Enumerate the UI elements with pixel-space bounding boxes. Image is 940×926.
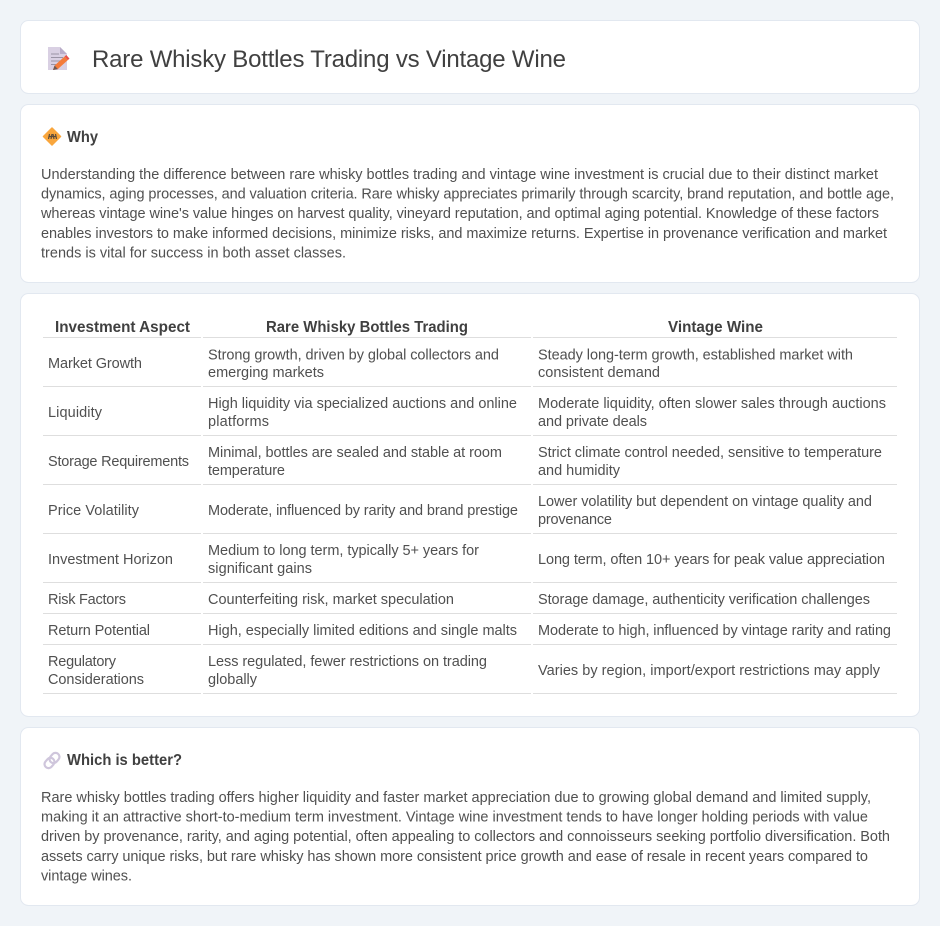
icon: chain link bbox=[43, 751, 61, 770]
row: storage requirements: Minimal, bottles are sealed and stable at room bbox=[208, 445, 502, 461]
row: price volatility: Price Volatility bbox=[48, 503, 140, 519]
icon: memo with pencil bbox=[48, 47, 69, 70]
row: regulatory considerations: Varies by region, import/export restrictions may apply bbox=[538, 663, 881, 679]
row: investment horizon: significant gains bbox=[208, 561, 312, 577]
row: regulatory considerations: Less regulated, fewer restrictions on trading bbox=[208, 654, 487, 670]
row: regulatory considerations: globally bbox=[208, 672, 258, 688]
row: return potential: Return Potential bbox=[48, 623, 150, 639]
row: market growth: emerging markets bbox=[208, 365, 324, 381]
row: storage requirements: temperature bbox=[208, 463, 285, 479]
row: market growth: consistent demand bbox=[538, 365, 660, 381]
row: return potential: Moderate to high, influenced by vintage rarity and rating bbox=[538, 623, 891, 639]
row: risk factors: Storage damage, authenticity verification challenges bbox=[538, 592, 870, 608]
row: storage requirements: Strict climate control needed, sensitive to temperature bbox=[538, 445, 882, 461]
row: regulatory considerations bbox=[43, 654, 897, 694]
row: price volatility: Lower volatility but dependent on vintage quality and bbox=[538, 494, 872, 510]
row: investment horizon: Investment Horizon bbox=[48, 552, 173, 568]
row: investment horizon: Medium to long term, typically 5+ years for bbox=[208, 543, 479, 559]
row: liquidity: and private deals bbox=[538, 414, 647, 430]
row: price volatility: provenance bbox=[538, 512, 612, 528]
text block: why: enables investors to make informed decisions, minimize risks, and maximize returns. Expertise in provenance verification and market bbox=[41, 226, 887, 242]
heading: which is better: Which is better? bbox=[67, 752, 182, 769]
row: risk factors: Counterfeiting risk, market speculation bbox=[208, 592, 454, 608]
heading: why: Why bbox=[67, 129, 98, 146]
row: investment horizon: Long term, often 10+ years for peak value appreciation bbox=[538, 552, 885, 568]
row: risk factors: Risk Factors bbox=[48, 592, 126, 608]
text block: why: trends is vital for success in both asset classes. bbox=[41, 245, 346, 261]
panel: which is better bbox=[20, 728, 920, 906]
row: liquidity: Moderate liquidity, often slower sales through auctions bbox=[538, 396, 886, 412]
text block: why: whereas vintage wine's value hinges on harvest quality, vineyard reputation, and optimal aging potential. Knowledge of these factors bbox=[40, 206, 879, 222]
text block: why bbox=[40, 167, 894, 261]
row: price volatility bbox=[43, 494, 897, 534]
row: investment horizon bbox=[43, 543, 897, 582]
row: market growth: Strong growth, driven by global collectors and bbox=[208, 348, 499, 364]
panel: comparison table bbox=[20, 294, 920, 716]
table header: Rare Whisky Bottles Trading bbox=[266, 319, 468, 336]
row: storage requirements bbox=[43, 445, 897, 484]
row: market growth: Steady long-term growth, established market with bbox=[538, 348, 853, 364]
row: liquidity: Liquidity bbox=[48, 405, 103, 421]
row: market growth bbox=[43, 348, 897, 386]
text block: which is better: assets carry unique risks, but rare whisky has shown more consistent price growth and ease of resale in recent years compared to bbox=[41, 849, 868, 865]
table header: Investment Aspect bbox=[55, 319, 191, 336]
row: regulatory considerations: Considerations bbox=[48, 672, 144, 688]
text block: which is better: vintage wines. bbox=[41, 868, 132, 884]
row: price volatility: Moderate, influenced by rarity and brand prestige bbox=[208, 503, 518, 519]
row: liquidity: platforms bbox=[208, 414, 269, 430]
text block: which is better: Rare whisky bottles trading offers higher liquidity and faster market appreciation due to growing global demand and limited supply, bbox=[41, 790, 871, 806]
row: storage requirements: Storage Requirements bbox=[48, 454, 189, 470]
icon: orange diamond sign bbox=[44, 128, 60, 145]
table header bbox=[43, 319, 897, 338]
text block: which is better: driven by provenance, rarity, and aging potential, often appealing to collectors and connoisseurs seeking portfolio diversification. Both bbox=[41, 829, 890, 845]
panel: why bbox=[20, 104, 920, 282]
row: return potential bbox=[43, 623, 897, 644]
row: storage requirements: and humidity bbox=[538, 463, 621, 479]
row: risk factors bbox=[43, 592, 897, 614]
title: Rare Whisky Bottles Trading vs Vintage Wine bbox=[92, 46, 566, 73]
panel: title header bbox=[20, 20, 920, 94]
text block: why: Understanding the difference between rare whisky bottles trading and vintage wine investment is crucial due to their distinct market bbox=[41, 167, 878, 183]
text block: why: dynamics, aging processes, and valuation criteria. Rare whisky appreciates primarily through scarcity, brand reputation, and bottle age, bbox=[41, 187, 894, 203]
row: return potential: High, especially limited editions and single malts bbox=[208, 623, 517, 639]
table header: Vintage Wine bbox=[668, 319, 763, 336]
row: regulatory considerations: Regulatory bbox=[48, 654, 117, 670]
row: market growth: Market Growth bbox=[48, 356, 142, 372]
row: liquidity bbox=[43, 396, 897, 436]
row: liquidity: High liquidity via specialized auctions and online bbox=[208, 396, 517, 412]
text block: which is better: making it an attractive short-to-medium term investment. Vintage wine investment tends to have longer holding periods with value bbox=[41, 810, 868, 826]
text block: which is better bbox=[41, 790, 890, 884]
